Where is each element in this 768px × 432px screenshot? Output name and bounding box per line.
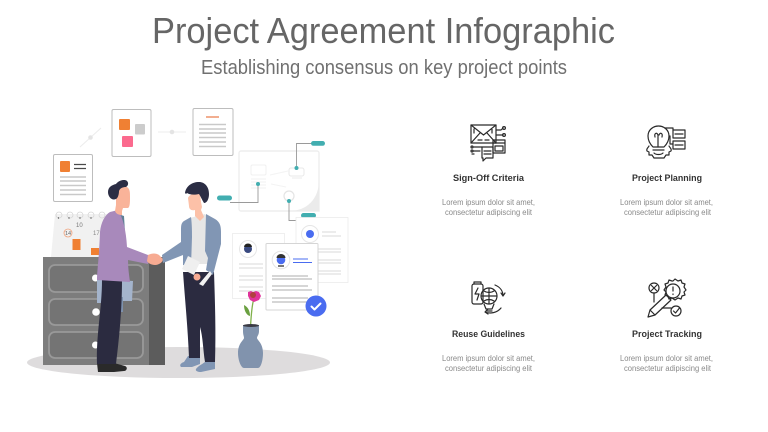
trousers <box>183 272 215 362</box>
subtitle: Establishing consensus on key project points <box>201 57 567 79</box>
body text: Lorem ipsum dolor sit amet, <box>442 198 535 207</box>
document: text page <box>193 108 233 156</box>
title: Project Agreement Infographic <box>152 10 615 51</box>
jacket and arm <box>162 214 221 275</box>
shirt <box>190 214 210 264</box>
body text <box>442 198 535 217</box>
neck and face <box>188 193 204 221</box>
calendar <box>51 212 120 257</box>
hair <box>185 182 209 203</box>
ground shadow <box>27 347 330 378</box>
hair <box>108 180 128 200</box>
shoe <box>97 363 127 372</box>
body text <box>620 354 713 373</box>
check badge <box>306 296 326 316</box>
torso and arm <box>97 210 148 282</box>
icon: lightbulb gear and charts <box>647 126 685 158</box>
trousers <box>97 280 122 364</box>
chart panel with teal connectors <box>217 141 325 220</box>
heading: Project Planning <box>632 173 702 184</box>
shirt strip <box>118 214 125 234</box>
body text: Lorem ipsum dolor sit amet, <box>620 354 713 363</box>
illustration: project agreement handshake <box>27 108 348 378</box>
icon: pencil gear and check <box>648 279 686 317</box>
resume stack <box>232 218 348 316</box>
heading: Project Tracking <box>632 329 702 340</box>
heading: Sign-Off Criteria <box>453 173 525 184</box>
document: orange heading card <box>54 154 92 202</box>
panel: project planning <box>620 126 713 217</box>
resume back left <box>232 234 284 298</box>
body text <box>442 354 535 373</box>
paper and hand <box>182 256 212 286</box>
body text: Lorem ipsum dolor sit amet, <box>442 354 535 363</box>
flower vase <box>238 291 263 368</box>
neck and face <box>115 187 130 215</box>
icon: envelope and documents <box>471 125 505 161</box>
connector decoration top left <box>80 128 186 147</box>
calendar: 14 <box>65 231 71 237</box>
body text: consectetur adipiscing elit <box>624 208 712 217</box>
shoes <box>180 356 200 367</box>
body text: Lorem ipsum dolor sit amet, <box>620 198 713 207</box>
body text: consectetur adipiscing elit <box>445 208 533 217</box>
body text <box>620 198 713 217</box>
folder <box>97 279 133 312</box>
calendar: 10 <box>76 223 83 229</box>
body text: consectetur adipiscing elit <box>445 364 533 373</box>
panel: reuse guidelines <box>442 282 535 373</box>
person left: purple shirt <box>97 180 163 372</box>
document: colored squares card <box>112 110 151 156</box>
hand <box>147 254 163 265</box>
icon: battery globe bulb with cycle arrows <box>472 282 505 314</box>
person right: blue jacket <box>162 182 221 372</box>
resume back right <box>296 218 348 282</box>
body text: consectetur adipiscing elit <box>624 364 712 373</box>
heading: Reuse Guidelines <box>452 329 525 340</box>
panel: project tracking <box>620 279 713 373</box>
resume front <box>266 244 318 310</box>
calendar: 17 <box>93 231 100 237</box>
panel: sign-off criteria <box>442 125 535 217</box>
drawer cabinet <box>43 257 165 365</box>
